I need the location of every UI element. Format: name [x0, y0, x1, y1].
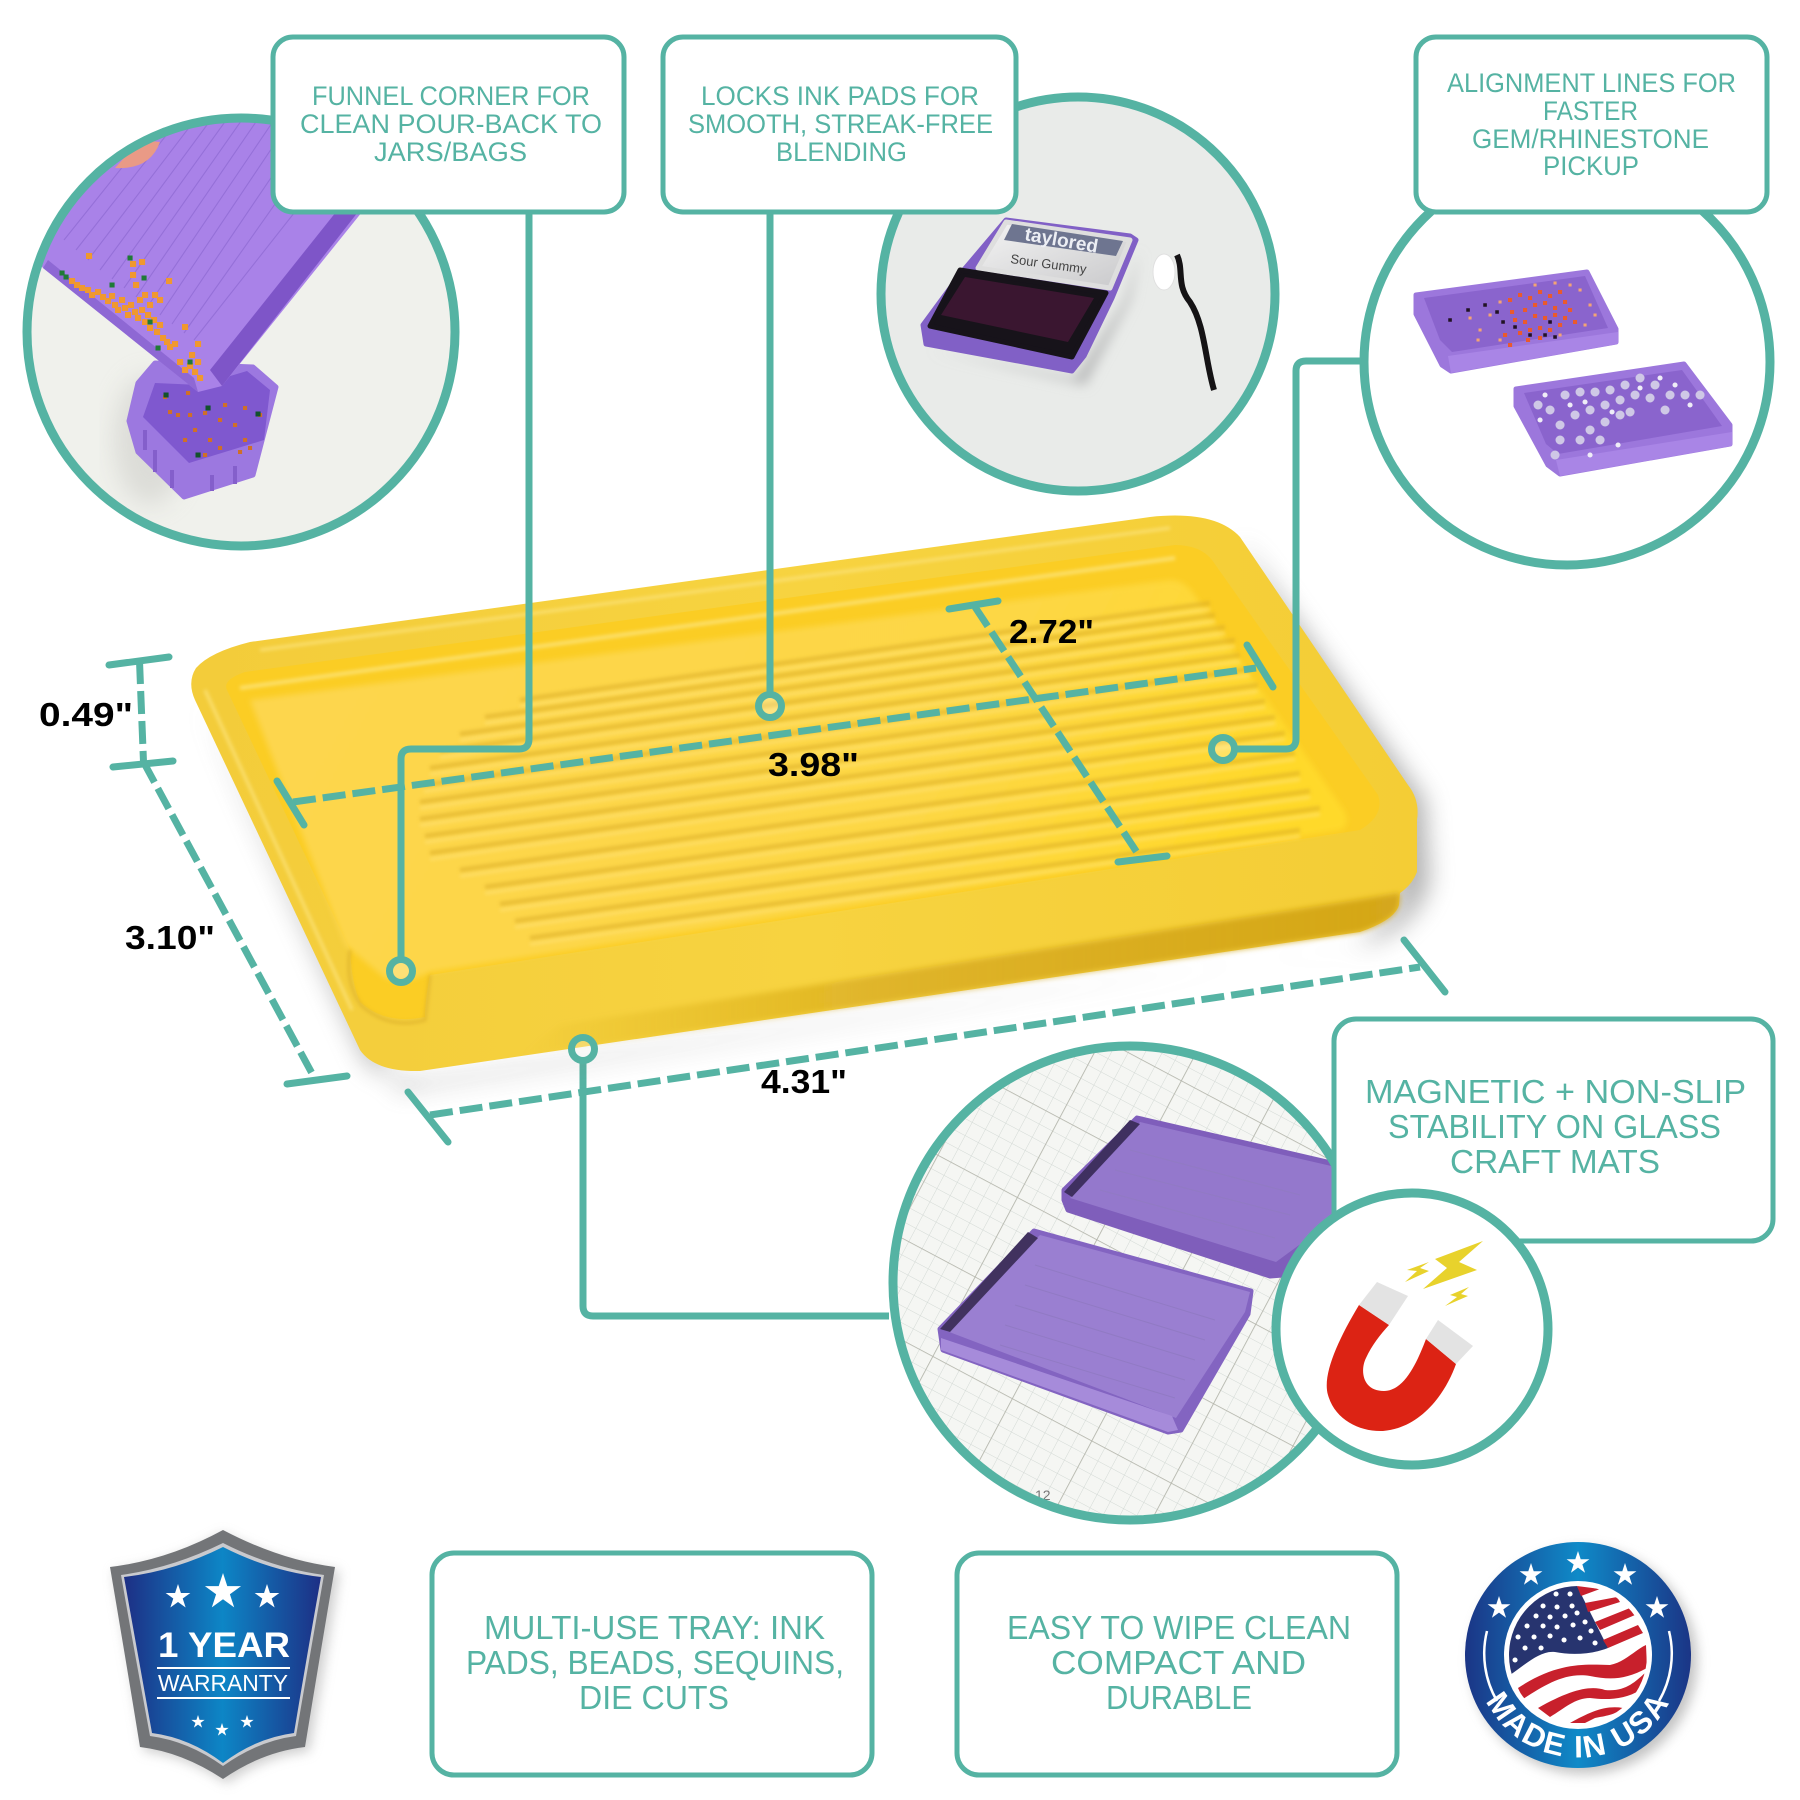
callout: funnel corner: JARS/BAGS [374, 137, 527, 167]
dimension 3.10 inch: 3.10" [125, 919, 215, 956]
tray with rhinestones [1516, 364, 1730, 474]
callout: easy to wipe clean: DURABLE [1106, 1679, 1252, 1716]
callout: locks ink pads [663, 37, 1016, 212]
connector dots [390, 694, 1234, 1060]
tray cavity [226, 545, 1380, 1019]
badge stars [1488, 1551, 1668, 1618]
outer rim highlight [205, 528, 1170, 1010]
flag disc [1504, 1581, 1652, 1729]
dark ink pad [930, 270, 1106, 357]
callout: alignment lines: PICKUP [1543, 151, 1639, 181]
purple tray tilted [42, 122, 360, 392]
shield frame [110, 1530, 335, 1779]
dimension 0.49 inch [39, 657, 173, 767]
fingertip [115, 140, 160, 168]
callout: locks ink pads: SMOOTH, STREAK-FREE [688, 109, 993, 139]
badge side arcs [1484, 1631, 1672, 1701]
connector: funnel corner callout [401, 214, 529, 959]
badge: 1 year warranty shield [110, 1530, 339, 1783]
badge: made in USA: MADE IN USA [1486, 1691, 1669, 1758]
dimension 4.31 inch: 4.31" [761, 1063, 847, 1100]
photo circle: trays on glass craft mat [888, 1042, 1332, 1524]
craft mat grid [898, 1050, 1326, 1516]
callout: multi-use tray [432, 1553, 872, 1775]
funnel crease [349, 950, 430, 1023]
callout: magnetic non-slip: STABILITY ON GLASS [1388, 1108, 1721, 1145]
callout: funnel corner: FUNNEL CORNER FOR [312, 81, 590, 111]
shield blue field [124, 1547, 321, 1763]
mat number: 12 [1035, 1487, 1051, 1503]
badge arc text [1490, 1708, 1666, 1757]
callout: easy to wipe clean: COMPACT AND [1051, 1644, 1306, 1681]
flag canton [1505, 1580, 1608, 1675]
tray lower lip [520, 893, 1400, 1056]
dimension 2.72 inch: 2.72" [1009, 613, 1094, 650]
purple tray base [923, 220, 1136, 371]
tray shadow [200, 540, 1430, 1090]
callout: funnel corner: CLEAN POUR-BACK TO [300, 109, 602, 139]
silver lid [978, 222, 1130, 288]
blending brush [1153, 254, 1175, 290]
callout: magnetic non-slip: MAGNETIC + NON-SLIP [1365, 1073, 1746, 1110]
photo circle: ink pad in tray: taylored [1023, 224, 1100, 258]
dimension 2.72 inch [949, 601, 1167, 862]
badge: 1 year warranty shield: WARRANTY [158, 1670, 288, 1696]
icon: magnet circle [1276, 1193, 1548, 1465]
main product: yellow tray [191, 516, 1430, 1090]
gems [1505, 292, 1575, 345]
callout: multi-use tray: MULTI-USE TRAY: INK [484, 1609, 825, 1646]
callout: easy to wipe clean: EASY TO WIPE CLEAN [1007, 1609, 1351, 1646]
callout: alignment lines: FASTER [1543, 96, 1638, 126]
cup shadow [111, 377, 174, 506]
lower purple tray [940, 1231, 1251, 1432]
flag canton stars [1515, 1594, 1595, 1660]
photo circle: ink pad in tray [881, 97, 1275, 491]
rhinestones [1538, 378, 1700, 455]
callout: multi-use tray: DIE CUTS [579, 1679, 729, 1716]
tray with gems [1416, 272, 1616, 371]
callout: funnel corner [273, 37, 624, 212]
callout: alignment lines: ALIGNMENT LINES FOR [1447, 68, 1736, 98]
tray floor [250, 580, 1347, 980]
rim highlight [240, 558, 1175, 688]
beads [72, 256, 200, 378]
flag stripes [1518, 1586, 1647, 1723]
groove lines [420, 603, 1320, 938]
dimension 3.10 inch [125, 762, 347, 1084]
callout: locks ink pads: BLENDING [776, 137, 907, 167]
dimension 4.31 inch [408, 940, 1445, 1142]
callout: locks ink pads: LOCKS INK PADS FOR [701, 81, 979, 111]
badge shadow [1471, 1548, 1697, 1774]
tray grooves [1000, 1150, 1300, 1398]
upper purple tray [1064, 1118, 1340, 1276]
callout: alignment lines [1416, 37, 1767, 212]
badge: made in USA [1464, 1542, 1704, 1780]
badge: 1 year warranty shield: 1 YEAR [158, 1626, 290, 1665]
tray body [191, 516, 1418, 1071]
photo circle: funnel corner pouring beads [27, 100, 455, 546]
connector: circle to tray base [583, 1061, 889, 1316]
storage cup [129, 363, 276, 497]
shield stars [166, 1573, 279, 1736]
magnet red body [1327, 1305, 1456, 1431]
callout: alignment lines: GEM/RHINESTONE [1472, 124, 1709, 154]
callout: multi-use tray: PADS, BEADS, SEQUINS, [466, 1644, 844, 1681]
lightning bolts [1405, 1241, 1483, 1306]
dimension 3.98 inch: 3.98" [768, 746, 859, 783]
magnet poles [1359, 1282, 1408, 1325]
photo circle: gem and rhinestone trays [1364, 159, 1770, 565]
connector: alignment lines callout [1235, 361, 1360, 749]
connector: ink pad callout [766, 214, 774, 694]
callout: magnetic non-slip: CRAFT MATS [1450, 1143, 1660, 1180]
dimension 3.98 inch [277, 645, 1273, 825]
tray grooves [64, 122, 294, 340]
groove highlights [420, 609, 1320, 944]
shield shadow [114, 1534, 339, 1783]
callout: magnetic non-slip [1334, 1019, 1773, 1241]
photo circle: ink pad in tray: Sour Gummy [1010, 251, 1088, 277]
pad shadow [1008, 276, 1136, 388]
dimension 0.49 inch: 0.49" [39, 696, 133, 733]
callout: easy to wipe clean [957, 1553, 1397, 1775]
